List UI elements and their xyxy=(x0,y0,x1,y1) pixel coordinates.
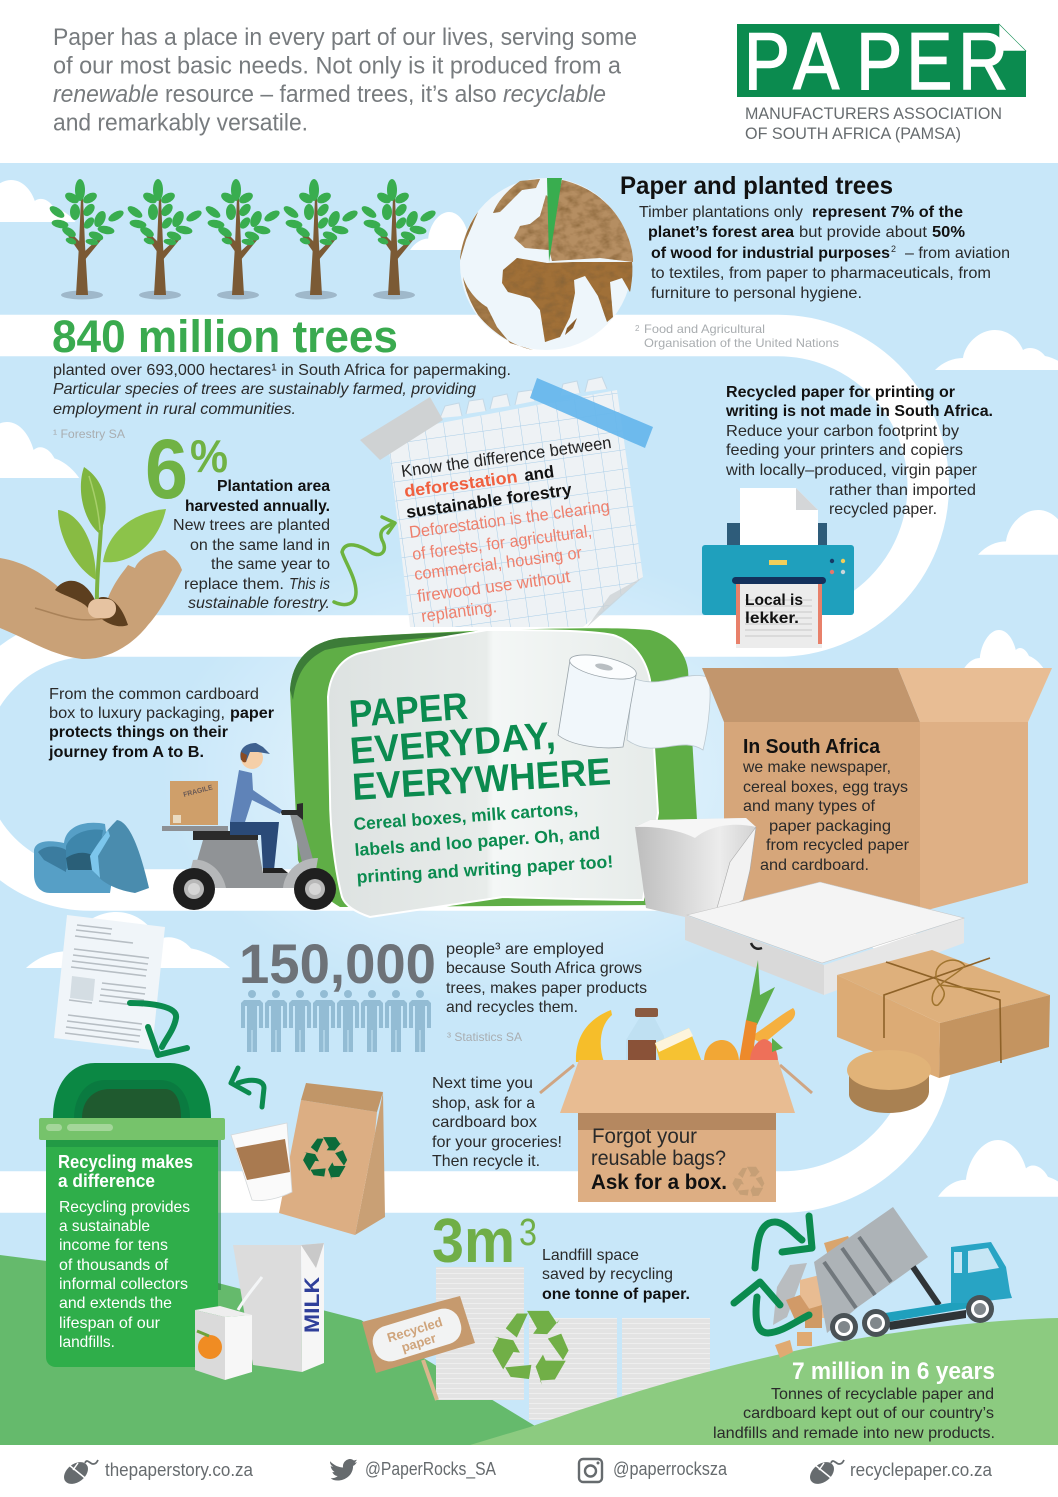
text: people employed xyxy=(446,941,647,1016)
panel: recycling bin: Recycling provides xyxy=(59,1199,190,1216)
logo: PAMSA: PAPER xyxy=(744,16,1008,106)
footnote 2: 2 xyxy=(635,324,640,333)
panel: grocery box xyxy=(540,1060,812,1202)
text: planted hectares: employment in rural communities. xyxy=(53,401,296,418)
heading: paper and planted trees: furniture to personal hygiene. xyxy=(651,285,862,302)
glow behind central paper xyxy=(160,545,840,1005)
icon: large recycle symbol xyxy=(487,1311,576,1389)
note: deforestation vs forestry: sustainable forestry xyxy=(405,480,573,522)
panel: recycling bin: a sustainable xyxy=(59,1218,150,1235)
panel: cardboard box xyxy=(700,668,1052,912)
tape: blue xyxy=(530,378,653,448)
text: recycled paper for printing: with locally–produced, virgin paper xyxy=(725,462,978,479)
text: 7 million in 6 years: cardboard kept out of our country’s xyxy=(743,1405,994,1422)
text: next time you shop xyxy=(432,1075,562,1170)
note: deforestation vs forestry xyxy=(360,377,653,627)
icon: noodle box xyxy=(635,818,756,917)
big number: 6% xyxy=(145,422,228,516)
header intro text: of our most basic needs. Not only is it produced from a xyxy=(53,52,622,80)
note: deforestation vs forestry: Know the difference between xyxy=(400,433,613,481)
text: from cardboard to luxury: paper xyxy=(230,705,274,722)
panel: central paper: Cereal boxes, milk cartons, xyxy=(353,798,579,834)
heading: paper and planted trees: represent 7% of the xyxy=(812,204,963,221)
big number: 150,000: 150,000 xyxy=(239,932,436,995)
panel: grocery box: reusable bags? xyxy=(591,1147,726,1170)
icon: printer: Local is xyxy=(745,592,803,609)
footnote 2: Food and Agricultural xyxy=(644,322,765,336)
light green hill xyxy=(470,1318,1058,1445)
panel: grocery box: Ask for a box. xyxy=(591,1171,727,1194)
note: deforestation vs forestry: replanting. xyxy=(420,597,498,626)
text: from cardboard to luxury: box to luxury packaging, xyxy=(49,705,225,722)
header intro text xyxy=(53,24,637,136)
panel: central paper xyxy=(290,628,697,917)
text: recycled paper for printing: Reduce your carbon footprint by xyxy=(726,423,959,440)
text: next time you shop: for your groceries! xyxy=(432,1134,562,1151)
footer: recyclepaper xyxy=(806,1458,993,1488)
heading: paper and planted trees: but provide about xyxy=(799,224,928,241)
sign: recycled paper xyxy=(362,1296,475,1400)
footnote 3: ³ Statistics SA xyxy=(447,1030,522,1044)
text: 7 million in 6 years: landfills and remade into new products. xyxy=(713,1425,995,1442)
footer: thepaperstory: thepaperstory.co.za xyxy=(105,1460,254,1480)
greenland and arctic xyxy=(493,179,540,213)
madagascar xyxy=(565,318,577,335)
logo: PAMSA xyxy=(737,16,1026,143)
panel: recycling bin: lifespan of our xyxy=(59,1315,161,1332)
big number: 840 million trees: 840 million trees xyxy=(52,311,398,362)
note: deforestation vs forestry: and xyxy=(523,462,555,485)
footnote 2 xyxy=(635,322,839,350)
text: planted hectares: planted over 693,000 hectares¹ in South Africa for papermaking. xyxy=(53,362,511,379)
panel: recycling bin: landfills. xyxy=(59,1334,115,1351)
text: recycled paper for printing: Recycled paper for printing or xyxy=(726,384,955,401)
icon: row of people xyxy=(241,990,431,1052)
header background xyxy=(0,0,1058,163)
panel: cardboard box: and many types of xyxy=(743,798,876,815)
heading: paper and planted trees: planet’s forest area xyxy=(648,224,794,241)
text: planted hectares xyxy=(53,362,511,418)
text: landfill space: Landfill space xyxy=(542,1247,639,1264)
icon: pizza box xyxy=(685,882,964,995)
white winding road xyxy=(0,336,933,1192)
note: deforestation vs forestry: deforestation xyxy=(403,467,519,501)
header intro text: renewable resource – farmed trees, it’s also recyclable xyxy=(53,81,606,108)
panel: recycling bin: informal collectors xyxy=(59,1276,188,1293)
text: people employed: people³ are employed xyxy=(446,941,604,958)
arrow: squiggle to note xyxy=(334,517,395,605)
text: landfill space xyxy=(542,1247,690,1303)
heading: paper and planted trees: 2 xyxy=(891,244,896,254)
heading: paper and planted trees: of wood for industrial purposes xyxy=(651,245,890,262)
text: plantation area: harvested annually. xyxy=(185,498,330,515)
globe with wood-chip continents xyxy=(460,178,633,350)
trees row xyxy=(48,179,437,300)
panel: recycling bin: a difference xyxy=(58,1171,155,1191)
panel: central paper: EVERYWHERE xyxy=(351,751,612,809)
footer: thepaperstory xyxy=(60,1458,254,1488)
asia and europe xyxy=(514,180,633,262)
panel: cardboard box: cereal boxes, egg trays xyxy=(743,779,908,796)
text: 7 million in 6 years: Tonnes of recyclable paper and xyxy=(771,1386,994,1403)
icon: scooter courier: FRAGILE xyxy=(183,784,214,799)
text: next time you shop: shop, ask for a xyxy=(432,1095,535,1112)
text: landfill space: one tonne of paper. xyxy=(542,1286,690,1303)
text: plantation area: on the same land in xyxy=(190,537,330,554)
panel: recycling bin: and extends the xyxy=(59,1295,172,1312)
text: plantation area: sustainable forestry. xyxy=(188,595,330,612)
note: deforestation vs forestry: firewood use without xyxy=(416,567,571,606)
text: recycled paper for printing xyxy=(725,384,993,518)
arrow: small recycle return xyxy=(231,1068,264,1107)
icon: parcel with string xyxy=(837,950,1050,1078)
note: deforestation vs forestry: of forests, for agricultural, xyxy=(411,522,593,564)
heading: paper and planted trees: Paper and planted trees xyxy=(620,172,893,200)
text: 7 million in 6 years xyxy=(713,1358,995,1442)
panel: cardboard box: from recycled paper xyxy=(766,837,910,854)
big number: 3m3: 3 xyxy=(519,1212,537,1254)
text: planted hectares: Particular species of trees are sustainably farmed, providing xyxy=(53,381,476,398)
icon: printer xyxy=(702,488,854,648)
panel: central paper: printing and writing paper too! xyxy=(356,851,614,887)
south america coast xyxy=(463,277,533,350)
footer: instagram xyxy=(579,1459,728,1482)
footnote 1: ¹ Forestry SA xyxy=(53,427,125,441)
panel: central paper: EVERYDAY, xyxy=(348,715,557,773)
footer: instagram: @paperrocksza xyxy=(613,1459,728,1479)
text: 7 million in 6 years: 7 million in 6 years xyxy=(792,1358,995,1385)
text: people employed: because South Africa grows xyxy=(446,960,642,977)
panel: central paper: PAPER xyxy=(348,686,469,736)
panel: recycling bin: Recycling makes xyxy=(58,1152,193,1172)
icon: juice box xyxy=(195,1277,262,1380)
icon: round box xyxy=(847,1050,931,1113)
text: recycled paper for printing: recycled paper. xyxy=(829,501,937,518)
footer: recyclepaper: recyclepaper.co.za xyxy=(850,1460,993,1480)
panel: cardboard box: we make newspaper, xyxy=(742,759,891,776)
icon: milk carton xyxy=(233,1243,324,1372)
footnote 2: Organisation of the United Nations xyxy=(644,336,839,350)
panel: recycling bin: income for tens xyxy=(59,1237,168,1254)
heading: paper and planted trees: – from aviation xyxy=(905,245,1010,262)
note: deforestation vs forestry: commercial, housing or xyxy=(413,543,583,584)
footer: twitter xyxy=(330,1459,496,1481)
africa and arabia xyxy=(502,258,632,342)
heading: paper and planted trees: Timber plantations only xyxy=(639,204,803,221)
heading: paper and planted trees xyxy=(620,172,1010,302)
heading: paper and planted trees: to textiles, from paper to pharmaceuticals, from xyxy=(651,265,991,282)
icon: document xyxy=(54,915,165,1050)
text: plantation area: the same year to xyxy=(211,556,330,573)
text: plantation area: New trees are planted xyxy=(173,517,330,534)
text: people employed: trees, makes paper products xyxy=(446,980,647,997)
text: from cardboard to luxury: protects things on their xyxy=(49,724,228,741)
text: landfill space: saved by recycling xyxy=(542,1266,673,1283)
text: plantation area: This is xyxy=(289,576,330,593)
panel: cardboard box: In South Africa xyxy=(743,736,881,758)
text: from cardboard to luxury: From the common cardboard xyxy=(49,686,259,703)
panel: cardboard box: paper packaging xyxy=(769,818,891,835)
text: plantation area: replace them. xyxy=(184,576,284,593)
icon: tipper truck with boxes xyxy=(773,1207,1012,1358)
logo: PAMSA: MANUFACTURERS ASSOCIATION xyxy=(745,104,1002,123)
arrows: green recycle around truck xyxy=(734,1216,812,1333)
icon: heart gift box xyxy=(34,820,149,893)
dark green hill xyxy=(0,1255,560,1445)
icon: coffee cup xyxy=(231,1123,292,1201)
icon: paper bag xyxy=(279,1083,385,1235)
text: next time you shop: cardboard box xyxy=(432,1114,537,1131)
text: next time you shop: Next time you xyxy=(432,1075,533,1092)
text: recycled paper for printing: feeding your printers and copiers xyxy=(726,442,963,459)
sign: recycled paper: Recycled xyxy=(385,1314,444,1345)
sign: recycled paper: paper xyxy=(400,1330,438,1355)
panel: recycling bin xyxy=(39,1063,225,1367)
text: people employed: and recycles them. xyxy=(446,999,578,1016)
left edge xyxy=(460,212,478,260)
note spiral tabs xyxy=(440,377,607,418)
text: plantation area: Plantation area xyxy=(217,478,330,495)
panel: grocery box: Forgot your xyxy=(592,1125,697,1148)
panel: central paper: labels and loo paper. Oh, and xyxy=(354,823,601,860)
icon: toilet roll xyxy=(558,650,710,750)
text: recycled paper for printing: rather than imported xyxy=(829,482,976,499)
heading: paper and planted trees: 50% xyxy=(932,224,965,241)
clouds xyxy=(0,180,1058,1197)
icon: scooter courier xyxy=(162,743,336,910)
icon: hand holding sprout xyxy=(0,467,182,659)
text: recycled paper for printing: writing is not made in South Africa. xyxy=(725,403,993,420)
icon: milk carton: MILK xyxy=(301,1277,324,1333)
text: plantation area xyxy=(173,478,330,612)
icon: printer: lekker. xyxy=(745,610,799,627)
text: next time you shop: Then recycle it. xyxy=(432,1153,540,1170)
big number: 3m3: 3m xyxy=(432,1207,515,1276)
arrow: into bin xyxy=(130,1003,187,1055)
header intro text: Paper has a place in every part of our lives, serving some xyxy=(53,24,637,51)
footer: twitter: @PaperRocks_SA xyxy=(365,1459,496,1480)
text: from cardboard to luxury xyxy=(48,686,274,761)
panel: recycling bin: of thousands of xyxy=(59,1257,169,1274)
icon: groceries xyxy=(576,960,795,1062)
note: deforestation vs forestry: Deforestation is the clearing xyxy=(408,497,611,542)
paper stacks xyxy=(436,1267,710,1420)
logo: PAMSA: OF SOUTH AFRICA (PAMSA) xyxy=(745,124,961,143)
header intro text: and remarkably versatile. xyxy=(53,110,308,136)
big number: 6%: % xyxy=(190,430,228,482)
text: from cardboard to luxury: journey from A to B. xyxy=(48,744,204,761)
tape: grey xyxy=(360,397,443,460)
big number: 6%: 6 xyxy=(145,422,188,516)
footer band xyxy=(0,1445,1058,1497)
panel: cardboard box: and cardboard. xyxy=(760,857,869,874)
